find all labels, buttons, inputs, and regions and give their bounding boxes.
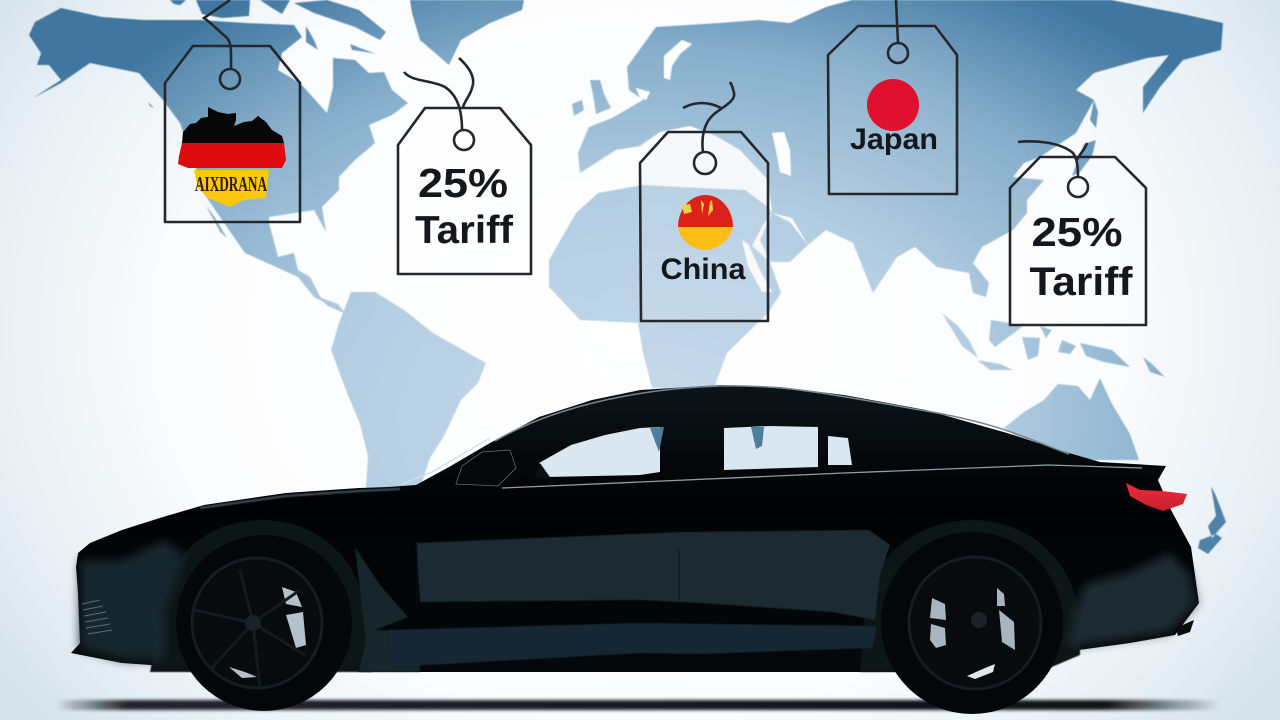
arabian peninsula [760, 213, 808, 262]
door seam [417, 545, 679, 606]
hanging string [896, 0, 898, 43]
british isles [572, 80, 611, 116]
price tag: China [640, 82, 768, 321]
tariff text: 25% [1032, 209, 1122, 255]
car [71, 385, 1199, 714]
hanging string [1018, 141, 1087, 178]
tail light [1126, 483, 1187, 511]
nose panel [80, 540, 185, 660]
China flag circle [678, 195, 733, 250]
fender panel [355, 547, 420, 672]
rear exhaust [1176, 620, 1194, 636]
price tag: Germany [165, 0, 300, 222]
Japan red circle [867, 79, 919, 131]
rear wheel [881, 532, 1063, 714]
rear quarter panel [1068, 553, 1196, 647]
arctic islands [170, 0, 386, 54]
price tag: Japan [828, 0, 957, 194]
price tag: 25% Tariff right: Tariff [1030, 260, 1133, 304]
roof and beltline highlights [495, 386, 1069, 454]
tag outline [828, 26, 957, 194]
tag outline [1010, 157, 1146, 325]
door panel lower [388, 623, 877, 667]
africa and arabia [549, 185, 781, 388]
tariff text: 25% [418, 160, 508, 206]
new zealand [1198, 486, 1226, 554]
a-pillar [535, 463, 552, 480]
Japan label: Japan [850, 123, 938, 156]
south america [331, 292, 486, 488]
greenland [410, 0, 524, 65]
world map [29, 0, 1226, 554]
price tag: 25% Tariff left [398, 58, 531, 274]
baja california and caribbean [148, 102, 372, 318]
price tag: 25% Tariff left: Tariff [415, 209, 514, 252]
north america [29, 8, 408, 305]
eurasia and middle east [578, 0, 1223, 297]
japan and sakhalin [1072, 100, 1098, 176]
hanging string [683, 82, 734, 152]
interior silhouettes [650, 427, 764, 452]
Germany flag map shape [178, 107, 286, 207]
red sea gap [742, 240, 772, 292]
wing mirror [456, 450, 516, 486]
southeast asia and indonesia [942, 313, 1165, 377]
door panel upper [416, 530, 890, 620]
side windows [539, 426, 852, 477]
tag outline [398, 108, 531, 274]
tag outline [165, 46, 300, 222]
tag outline [640, 132, 768, 321]
Germany label: AIXDRANA [195, 172, 268, 196]
ground shadow [56, 700, 1220, 710]
price tag: 25% Tariff right [1010, 141, 1146, 325]
front grille [82, 600, 112, 634]
wheel arch bands [150, 520, 1080, 672]
front wheel [176, 535, 352, 711]
australia [1004, 378, 1139, 460]
hanging string [404, 58, 473, 130]
hanging string [204, 0, 231, 69]
car body [71, 385, 1199, 672]
caspian sea and baltic sea [636, 40, 791, 176]
China label: China [660, 253, 746, 286]
